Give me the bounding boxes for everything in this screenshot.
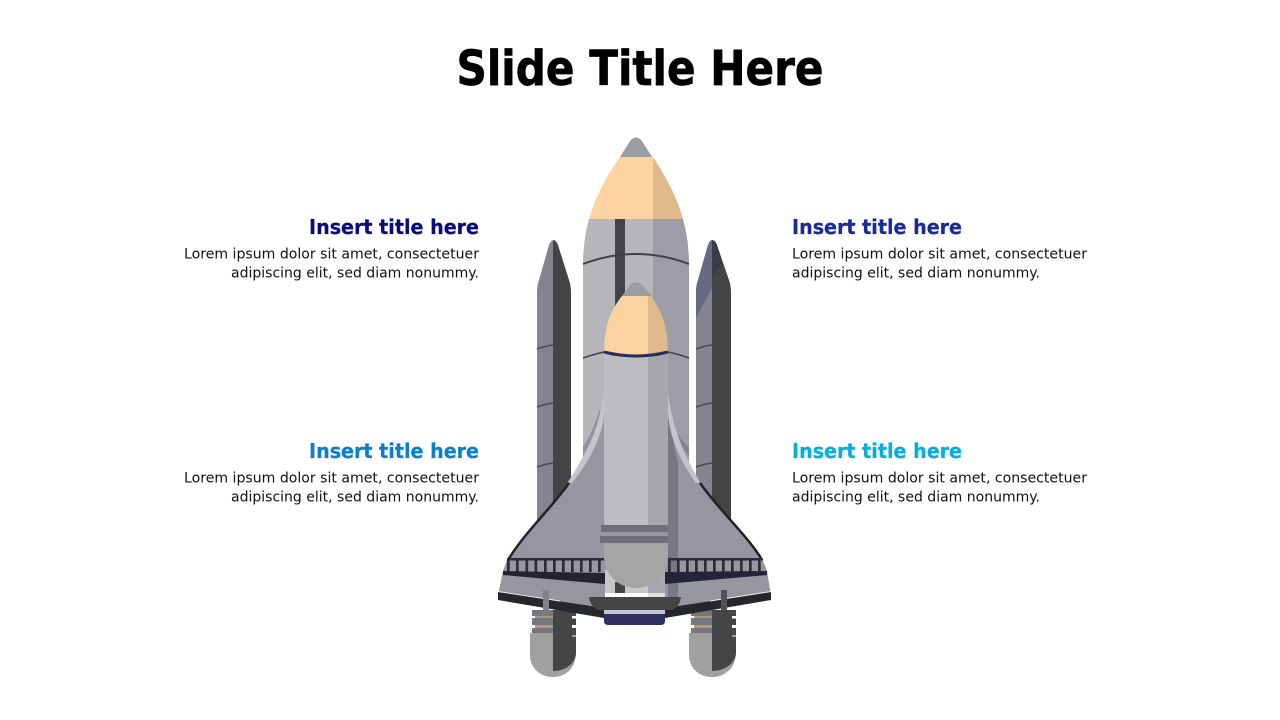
text block: top right: Insert title here bbox=[792, 215, 962, 239]
text block: top right bbox=[792, 215, 1087, 282]
text block: top left: adipiscing elit, sed diam nonummy. bbox=[231, 266, 479, 282]
engine right bbox=[689, 610, 736, 677]
orbiter wings bbox=[498, 392, 771, 618]
right booster bbox=[696, 240, 731, 530]
text block: bottom left: Lorem ipsum dolor sit amet, consectetuer bbox=[184, 470, 479, 486]
text block: bottom left: Insert title here bbox=[309, 439, 479, 463]
text block: bottom left: adipiscing elit, sed diam nonummy. bbox=[231, 490, 479, 506]
right rail bbox=[667, 558, 763, 572]
text block: bottom right: Insert title here bbox=[792, 439, 962, 463]
text block: top left: Lorem ipsum dolor sit amet, consectetuer bbox=[184, 246, 479, 262]
text block: top right: Lorem ipsum dolor sit amet, consectetuer bbox=[792, 246, 1087, 262]
main tank bbox=[583, 138, 689, 490]
text block: bottom left bbox=[184, 439, 479, 506]
orbiter body bbox=[589, 282, 681, 625]
engine left bbox=[530, 610, 576, 677]
left rail bbox=[507, 558, 605, 572]
icon: space shuttle bbox=[498, 138, 771, 677]
text block: bottom right bbox=[792, 439, 1087, 506]
text block: top left bbox=[184, 215, 479, 282]
left booster bbox=[537, 240, 571, 530]
text block: bottom right: adipiscing elit, sed diam nonummy. bbox=[792, 490, 1040, 506]
title: Slide Title Here bbox=[456, 41, 824, 97]
text block: top left: Insert title here bbox=[309, 215, 479, 239]
text block: top right: adipiscing elit, sed diam nonummy. bbox=[792, 266, 1040, 282]
text block: bottom right: Lorem ipsum dolor sit amet, consectetuer bbox=[792, 470, 1087, 486]
